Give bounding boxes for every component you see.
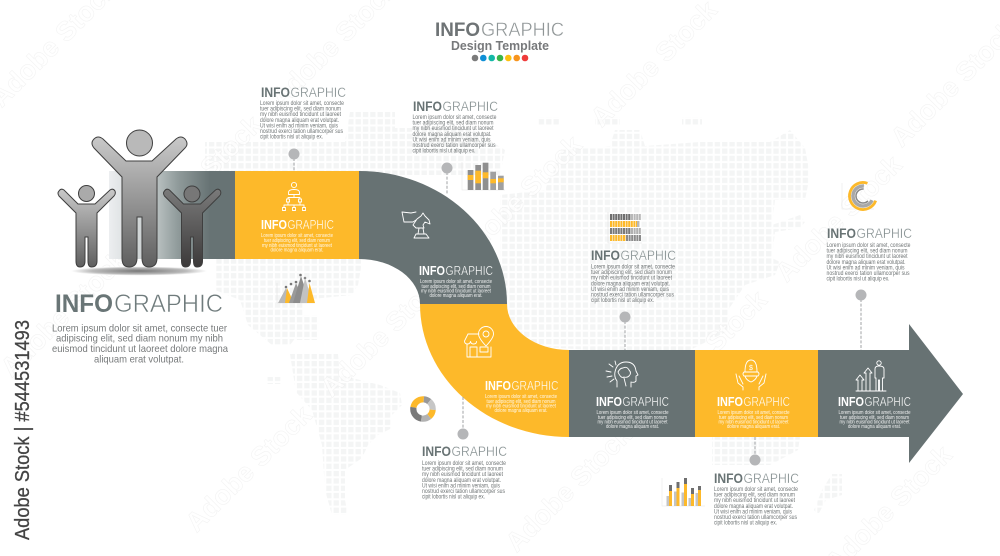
step 6 label text: my nibh euismod tincidunt ut laoreet — [840, 420, 910, 426]
icon: head with brain — [606, 361, 638, 387]
title: INFO — [435, 20, 480, 41]
step 2 label text — [419, 263, 493, 299]
step 1 label text: tuer adipiscing elit, sed diam nonum — [264, 238, 330, 244]
stock watermarks: Adobe Stock — [450, 129, 588, 268]
callout 1: text block with pin: GRAPHIC — [290, 84, 346, 100]
step 3 label text: tuer adipiscing elit, sed diam nonum — [486, 399, 556, 405]
step 3 label text: Lorem ipsum dolor sit amet, consecte — [485, 394, 557, 400]
step 6 label text: INFO — [838, 394, 864, 409]
callout 3: text block with pin: Lorem ipsum dolor sit amet, consecte — [591, 264, 675, 270]
step 1 label text: INFO — [261, 217, 287, 232]
step 5 label text: GRAPHIC — [744, 394, 790, 409]
callout 2: text block with pin: GRAPHIC — [442, 98, 498, 114]
step 5 label text: INFO — [717, 394, 743, 409]
timeline band start with gradient — [109, 171, 236, 259]
callout 4: text block with pin — [422, 397, 507, 501]
callout 2: text block with pin: dolore magna aliquam erat volutpat. — [412, 131, 492, 138]
title: Design Template — [451, 38, 549, 53]
chart: stacked bars — [462, 162, 505, 190]
step 2 label text: my nibh euismod tincidunt ut laoreet — [421, 288, 491, 294]
callout 5: text block with pin: Ut wisi enim ad minim veniam, quis — [714, 508, 792, 515]
stock watermarks: Adobe Stock — [130, 109, 268, 248]
step 1 yellow panel — [235, 171, 359, 259]
callout 6: text block with pin: my nibh euismod tincidunt ut laoreet — [826, 253, 908, 260]
main heading and intro text: INFO — [55, 290, 113, 318]
step 6 gray arrow — [818, 324, 963, 463]
callout 4: text block with pin: INFO — [422, 443, 451, 459]
step 1 label text — [261, 217, 334, 254]
main heading and intro text: GRAPHIC — [114, 290, 223, 318]
callout 6: text block with pin: GRAPHIC — [856, 225, 912, 241]
step 3 label text: INFO — [485, 378, 511, 393]
step 5 yellow panel — [695, 350, 818, 437]
step 4 label text: GRAPHIC — [622, 394, 669, 409]
step 1 label text: dolore magna aliquam erat. — [270, 248, 324, 254]
callout 2: text block with pin: Ut wisi enim ad minim veniam, quis — [412, 136, 490, 143]
callout 4: text block with pin: GRAPHIC — [452, 443, 507, 459]
callout 5: text block with pin: GRAPHIC — [744, 470, 799, 486]
icon: organisation chart — [282, 182, 306, 210]
icon: family of three people — [58, 130, 221, 267]
callout 6: text block with pin: Ut wisi enim ad minim veniam, quis — [826, 264, 904, 271]
callout 5: text block with pin: INFO — [714, 470, 743, 486]
main heading and intro text — [52, 290, 228, 366]
callout 2: text block with pin: cipit lobortis nisl ut aliquip ex. — [412, 148, 476, 155]
callout 3: text block with pin: GRAPHIC — [620, 247, 676, 263]
callout 4: text block with pin: tuer adipiscing elit, sed diam nonum — [422, 466, 503, 473]
callout 1: text block with pin: dolore magna aliquam erat volutpat. — [260, 117, 339, 124]
step 6 label text: dolore magna aliquam erat. — [848, 424, 901, 430]
callout 1: text block with pin: Lorem ipsum dolor sit amet, consecte — [260, 100, 344, 107]
callout 6: text block with pin: nostrud exerci tation ullamcorper sus — [826, 270, 910, 277]
chart: mountain peaks — [277, 274, 315, 303]
callout 4: text block with pin: dolore magna aliquam erat volutpat. — [422, 477, 501, 484]
step 2 label text: tuer adipiscing elit, sed diam nonum — [422, 284, 491, 290]
step 5 label text: Lorem ipsum dolor sit amet, consecte — [718, 410, 790, 416]
callout 1: text block with pin: Ut wisi enim ad minim veniam, quis — [260, 122, 338, 129]
step 4 label text: Lorem ipsum dolor sit amet, consecte — [596, 410, 668, 416]
callout 5: text block with pin: Lorem ipsum dolor sit amet, consecte — [714, 486, 798, 493]
main heading and intro text: adipiscing elit, sed diam nonum my nibh — [56, 334, 223, 344]
callout 2: text block with pin — [412, 98, 498, 195]
callout 4: text block with pin: nostrud exerci tation ullamcorper sus — [422, 488, 505, 495]
callout 4: text block with pin: my nibh euismod tincidunt ut laoreet — [422, 471, 503, 478]
step 3 label text — [485, 378, 558, 414]
title: GRAPHIC — [481, 20, 564, 41]
icon: hands holding money — [736, 360, 766, 390]
callout 2: text block with pin: tuer adipiscing elit, sed diam nonum — [412, 120, 494, 127]
callout 5: text block with pin: dolore magna aliquam erat volutpat. — [714, 503, 793, 510]
callout 1: text block with pin: my nibh euismod tincidunt ut laoreet — [260, 111, 341, 118]
callout 5: text block with pin: nostrud exerci tation ullamcorper sus — [714, 514, 797, 521]
callout 3: text block with pin: INFO — [591, 247, 620, 263]
title — [435, 20, 564, 61]
stock watermarks: Adobe Stock — [500, 419, 638, 556]
callout 5: text block with pin: tuer adipiscing elit, sed diam nonum — [714, 492, 795, 499]
shadow under people — [71, 266, 207, 276]
main heading and intro text: euismod tincidunt ut laoreet dolore magna — [52, 344, 228, 355]
step 4 label text: my nibh euismod tincidunt ut laoreet — [598, 420, 668, 426]
chart: donut — [413, 399, 433, 419]
step 5 label text: tuer adipiscing elit, sed diam nonum — [719, 415, 788, 421]
callout 5: text block with pin — [714, 437, 799, 527]
step 6 label text — [838, 394, 911, 430]
step 5 label text: dolore magna aliquam erat. — [727, 424, 780, 430]
step 2 label text: INFO — [419, 263, 445, 278]
stock watermarks: Adobe Stock — [180, 399, 318, 538]
callout 4: text block with pin: Lorem ipsum dolor sit amet, consecte — [422, 460, 506, 467]
callout 2: text block with pin: my nibh euismod tincidunt ut laoreet — [412, 125, 494, 132]
stock id vertical text: Adobe Stock | #544531493 — [12, 320, 34, 540]
step 2 label text: GRAPHIC — [446, 263, 493, 278]
callout 2: text block with pin: INFO — [413, 98, 442, 114]
callout 2: text block with pin: nostrud exerci tation ullamcorper sus — [412, 142, 496, 149]
step 1 label text: my nibh euismod tincidunt ut laoreet — [262, 243, 332, 249]
step 4 label text: dolore magna aliquam erat. — [606, 424, 659, 430]
callout 4: text block with pin: cipit lobortis nisl ut aliquip ex. — [422, 494, 485, 501]
icon: store with location pin — [464, 327, 494, 357]
callout 3: text block with pin: nostrud exerci tation ullamcorper sus — [591, 292, 674, 298]
step 3 label text: my nibh euismod tincidunt ut laoreet — [486, 404, 556, 410]
callout 6: text block with pin — [826, 225, 912, 350]
stock watermarks: Adobe Stock — [770, 149, 908, 288]
stock watermarks: Adobe Stock — [315, 264, 453, 403]
callout 3: text block with pin: tuer adipiscing elit, sed diam nonum — [591, 269, 672, 276]
callout 1: text block with pin: tuer adipiscing elit, sed diam nonum — [260, 106, 341, 113]
callout 3: text block with pin: dolore magna aliquam erat volutpat. — [591, 280, 670, 287]
step 1 label text: GRAPHIC — [288, 217, 334, 232]
callout 5: text block with pin: cipit lobortis nisl ut aliquip ex. — [714, 520, 777, 527]
callout 6: text block with pin: INFO — [827, 225, 856, 241]
callout 3: text block with pin: Ut wisi enim ad minim veniam, quis — [591, 286, 669, 293]
main heading and intro text: Lorem ipsum dolor sit amet, consecte tuer — [52, 324, 227, 334]
callout 1: text block with pin — [260, 84, 346, 171]
dotted world map background — [190, 100, 850, 520]
callout 6: text block with pin: dolore magna aliquam erat volutpat. — [826, 259, 906, 266]
main heading and intro text: aliquam erat volutpat. — [94, 354, 184, 366]
icon: man beside growth arrows — [856, 361, 886, 391]
stock watermarks: Adobe Stock — [635, 284, 773, 423]
callout 3: text block with pin — [591, 247, 676, 350]
step 2 label text: dolore magna aliquam erat. — [430, 293, 483, 299]
step 5 label text: my nibh euismod tincidunt ut laoreet — [718, 420, 789, 426]
step 4 gray panel — [569, 350, 695, 437]
step 3 label text: dolore magna aliquam erat. — [494, 408, 548, 414]
step 1 label text: Lorem ipsum dolor sit amet, consecte — [261, 233, 333, 239]
step 5 label text — [717, 394, 790, 430]
step 6 label text: GRAPHIC — [864, 394, 911, 409]
callout 1: text block with pin: cipit lobortis nisl ut aliquip ex. — [260, 134, 323, 141]
chart: radial arcs — [842, 179, 880, 213]
step 3 label text: GRAPHIC — [512, 378, 558, 393]
step 6 label text: tuer adipiscing elit, sed diam nonum — [840, 415, 909, 421]
callout 4: text block with pin: Ut wisi enim ad minim veniam, quis — [422, 482, 500, 489]
callout 3: text block with pin: my nibh euismod tincidunt ut laoreet — [591, 275, 672, 282]
chart: grouped bars — [662, 478, 705, 506]
callout 2: text block with pin: Lorem ipsum dolor sit amet, consecte — [412, 114, 497, 121]
step 3 yellow curved panel — [420, 304, 569, 437]
step 6 label text: Lorem ipsum dolor sit amet, consecte — [838, 410, 910, 416]
step 2 label text: Lorem ipsum dolor sit amet, consecte — [420, 279, 492, 285]
callout 1: text block with pin: nostrud exerci tation ullamcorper sus — [260, 128, 343, 135]
step 4 label text: INFO — [596, 394, 622, 409]
callout 1: text block with pin: INFO — [261, 84, 290, 100]
step 4 label text — [596, 394, 669, 430]
callout 5: text block with pin: my nibh euismod tincidunt ut laoreet — [714, 497, 795, 504]
chart: people rows — [608, 212, 642, 243]
step 2 gray curved panel — [359, 171, 507, 304]
icon: hands holding money: $ — [749, 365, 753, 372]
callout 6: text block with pin: Lorem ipsum dolor sit amet, consecte — [826, 242, 911, 249]
step 4 label text: tuer adipiscing elit, sed diam nonum — [598, 415, 667, 421]
callout 6: text block with pin: cipit lobortis nisl ut aliquip ex. — [826, 276, 890, 283]
icon: chess knight with hand — [402, 212, 430, 238]
callout 3: text block with pin: cipit lobortis nisl ut aliquip ex. — [591, 297, 654, 304]
callout 6: text block with pin: tuer adipiscing elit, sed diam nonum — [826, 248, 908, 255]
